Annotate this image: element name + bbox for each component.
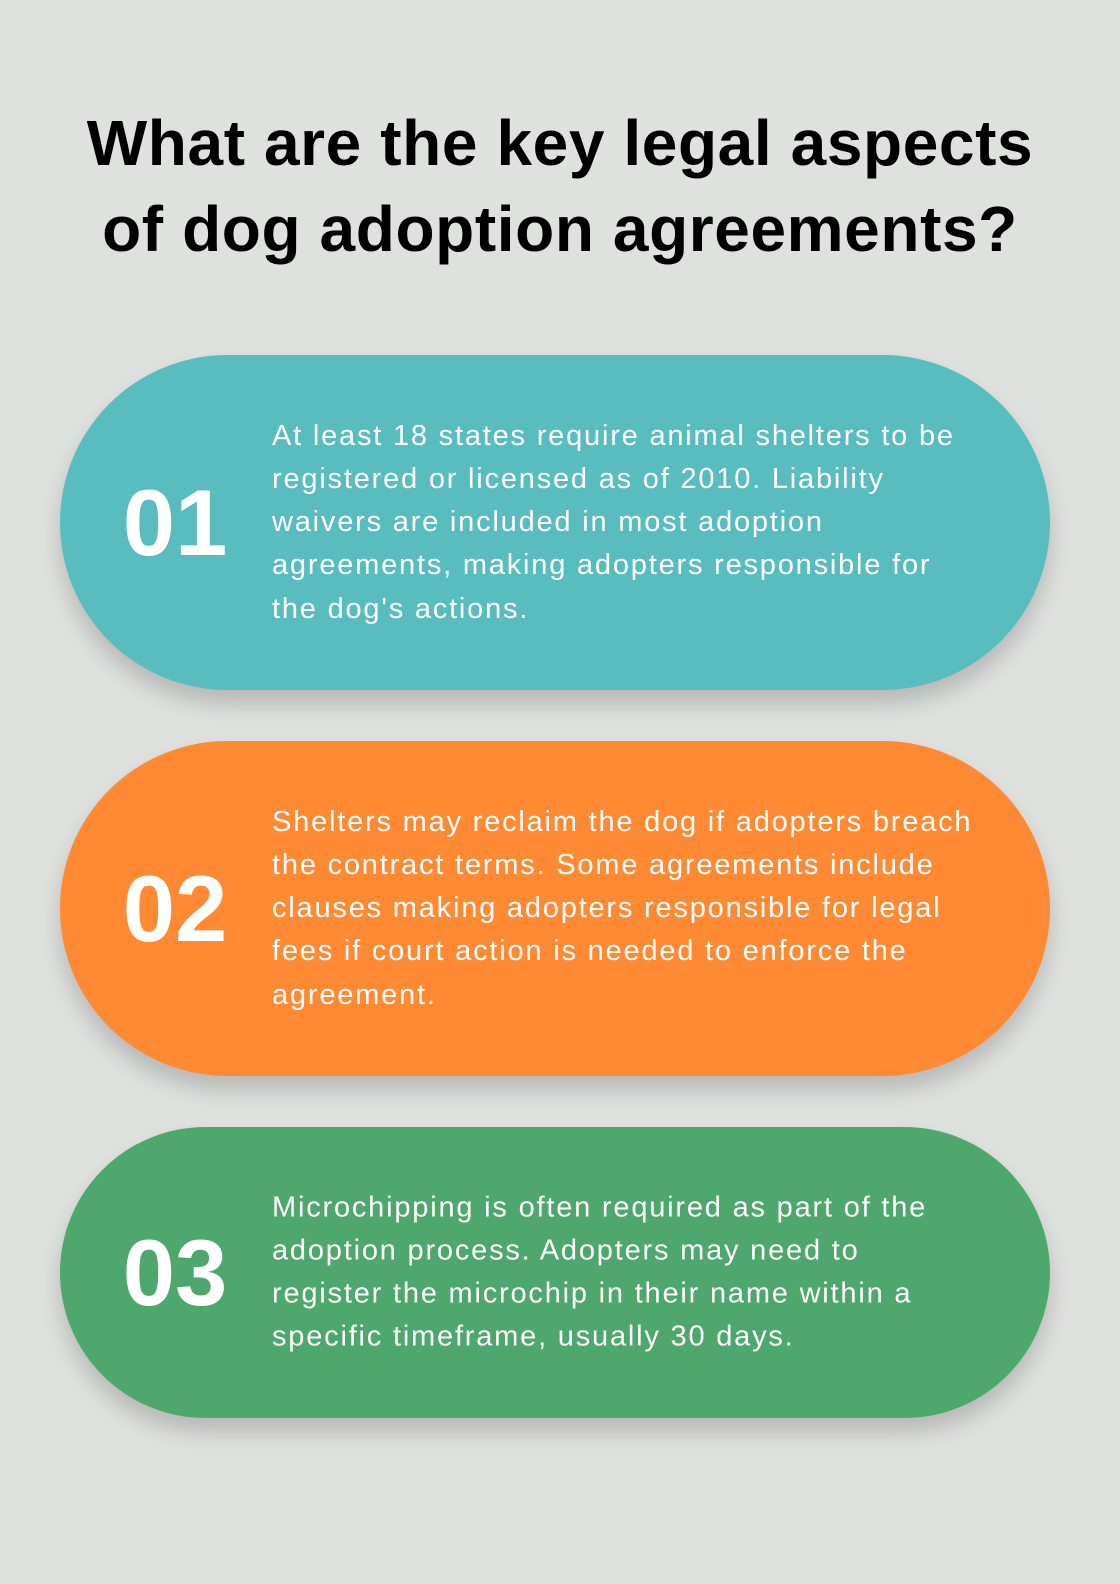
text 03 <box>272 1191 927 1353</box>
text 02: agreement. <box>272 978 437 1010</box>
text 01: registered or licensed as of 2010. Liability <box>272 463 885 495</box>
panel: card 03 <box>60 1127 1050 1418</box>
text 02: clauses making adopters responsible for legal <box>272 892 941 924</box>
panel: card 02 <box>60 741 1050 1076</box>
text 02: fees if court action is needed to enforce the <box>272 935 908 967</box>
number 02: 02 <box>123 856 227 960</box>
text 03: specific timeframe, usually 30 days. <box>272 1321 795 1353</box>
text 01 <box>272 419 955 624</box>
title: of dog adoption agreements? <box>102 193 1018 265</box>
text 02: the contract terms. Some agreements include <box>272 849 935 881</box>
text 02 <box>272 805 972 1010</box>
panel: card 01 <box>60 355 1050 690</box>
title: What are the key legal aspects <box>87 107 1033 179</box>
text 03: register the microchip in their name within a <box>272 1278 912 1310</box>
text 03: adoption process. Adopters may need to <box>272 1234 860 1266</box>
text 01: the dog's actions. <box>272 592 529 624</box>
text 02: Shelters may reclaim the dog if adopters breach <box>272 805 972 837</box>
text 03: Microchipping is often required as part of the <box>272 1191 927 1223</box>
number 01: 01 <box>123 470 227 574</box>
text 01: waivers are included in most adoption <box>272 506 824 538</box>
text 01: agreements, making adopters responsible for <box>272 549 931 581</box>
text 01: At least 18 states require animal shelters to be <box>272 419 955 451</box>
title <box>86 107 1033 265</box>
number 03: 03 <box>123 1220 227 1324</box>
